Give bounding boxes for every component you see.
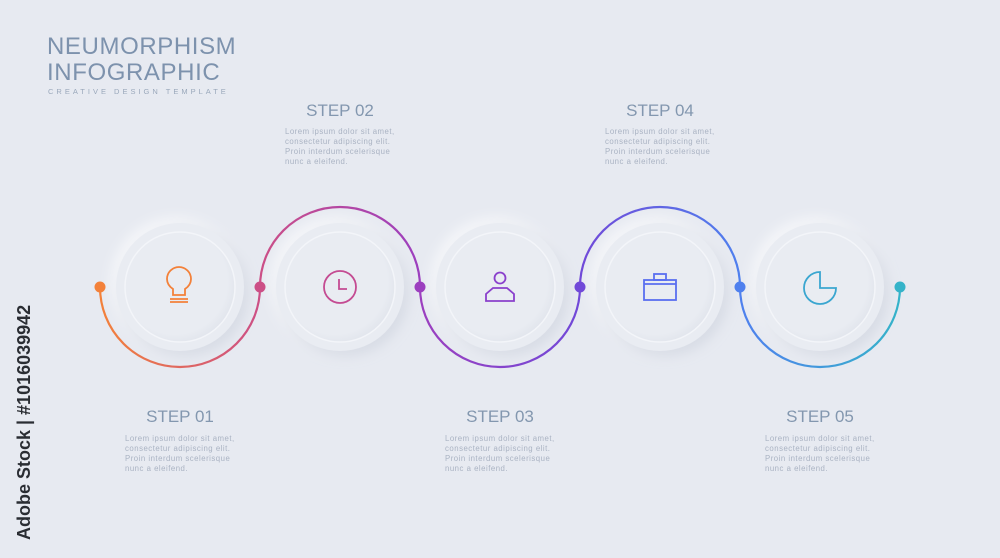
text: step 01: consectetur adipiscing elit. — [125, 444, 230, 453]
text: step 05: nunc a eleifend. — [765, 464, 828, 473]
icon: person — [486, 272, 514, 301]
icon: briefcase — [644, 274, 676, 300]
text: step 05 — [765, 407, 875, 473]
text: step 05: Lorem ipsum dolor sit amet, — [765, 434, 875, 443]
title: NEUMORPHISM — [47, 33, 236, 60]
text: step 04: consectetur adipiscing elit. — [605, 137, 710, 146]
text: step 04: Lorem ipsum dolor sit amet, — [605, 127, 715, 136]
timeline arcs — [100, 207, 900, 367]
text: step 03: consectetur adipiscing elit. — [445, 444, 550, 453]
timeline dots — [94, 282, 906, 292]
text: step 03: STEP 03 — [466, 407, 534, 426]
text: step 01: STEP 01 — [146, 407, 214, 426]
watermark id: Adobe Stock | #1016039942 — [14, 305, 34, 540]
text: step 02: nunc a eleifend. — [285, 157, 348, 166]
circle: step 4 — [596, 223, 724, 351]
text: step 04: nunc a eleifend. — [605, 157, 668, 166]
text: step 03: nunc a eleifend. — [445, 464, 508, 473]
text: step 02 — [285, 101, 395, 166]
text: step 04: Proin interdum scelerisque — [605, 147, 710, 156]
text: step 03 — [445, 407, 555, 473]
title: INFOGRAPHIC — [47, 59, 220, 86]
text: step 02: consectetur adipiscing elit. — [285, 137, 390, 146]
title — [47, 33, 236, 96]
icon: pie chart — [804, 272, 836, 304]
text: step 05: STEP 05 — [786, 407, 854, 426]
title: CREATIVE DESIGN TEMPLATE — [48, 87, 229, 96]
text: step 03: Lorem ipsum dolor sit amet, — [445, 434, 555, 443]
circle: step 5 — [756, 223, 884, 351]
text: step 01: Lorem ipsum dolor sit amet, — [125, 434, 235, 443]
text: step 02: Proin interdum scelerisque — [285, 147, 390, 156]
text: step 03: Proin interdum scelerisque — [445, 454, 550, 463]
text: step 01: Proin interdum scelerisque — [125, 454, 230, 463]
circle: step 1 — [116, 223, 244, 351]
text: step 02: Lorem ipsum dolor sit amet, — [285, 127, 395, 136]
icon: clock — [324, 271, 356, 303]
text: step 04 — [605, 101, 715, 166]
text: step 01 — [125, 407, 235, 473]
circle: step 3 — [436, 223, 564, 351]
text: step 02: STEP 02 — [306, 101, 374, 120]
text: step 01: nunc a eleifend. — [125, 464, 188, 473]
icon: light bulb — [167, 267, 191, 302]
circle: step 2 — [276, 223, 404, 351]
text: step 04: STEP 04 — [626, 101, 694, 120]
text: step 05: consectetur adipiscing elit. — [765, 444, 870, 453]
text: step 05: Proin interdum scelerisque — [765, 454, 870, 463]
